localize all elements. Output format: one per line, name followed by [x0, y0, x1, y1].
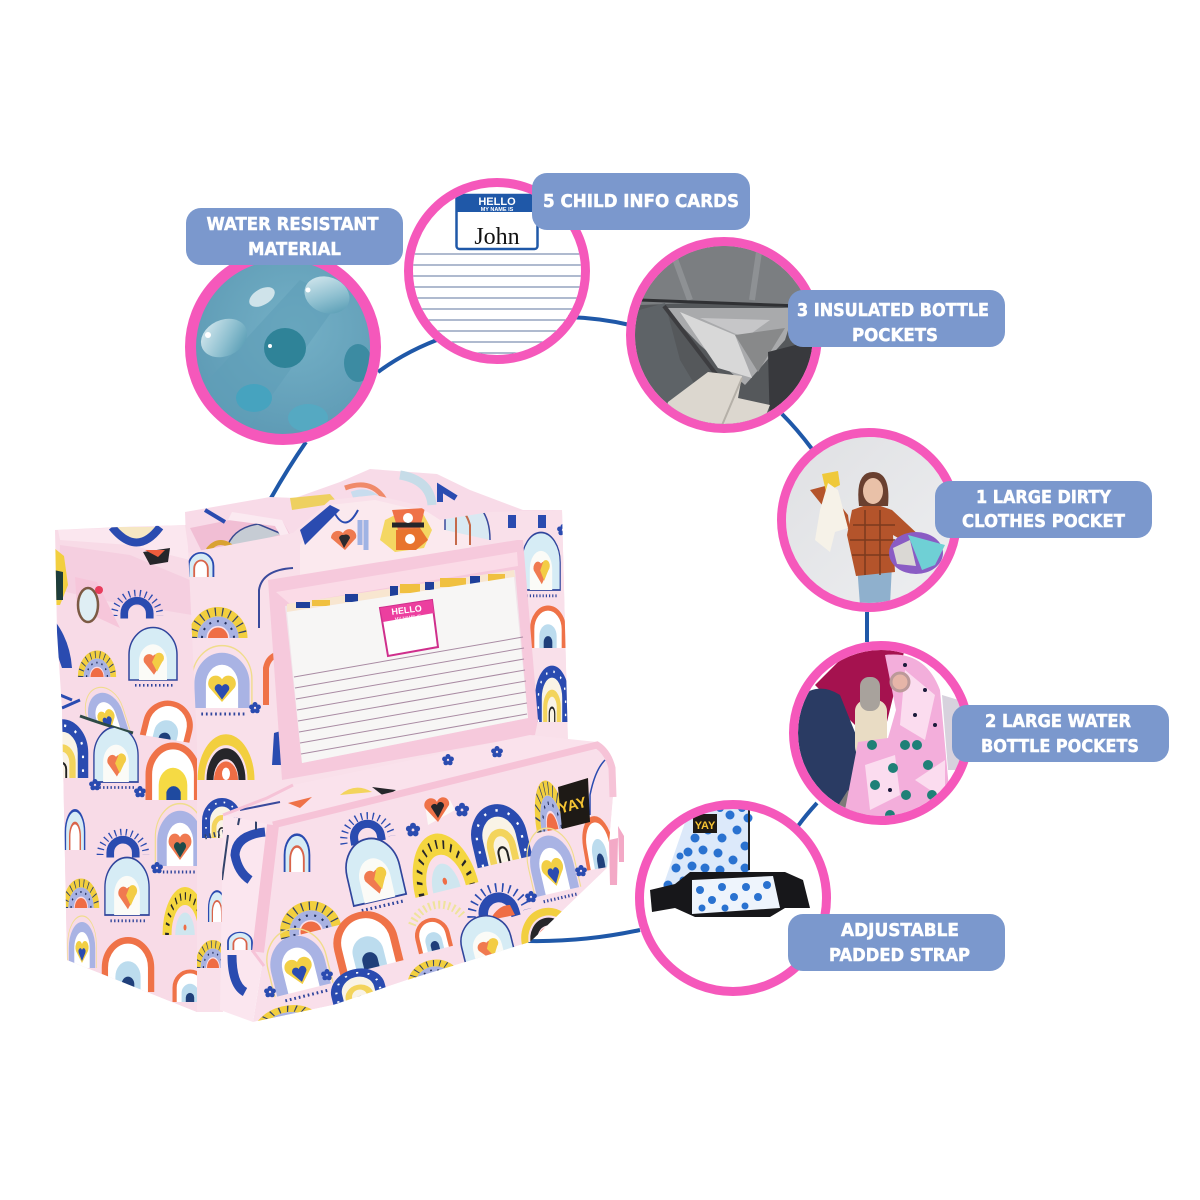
label: 1 large dirty clothes pocket: 1 LARGE DIRTY [976, 488, 1111, 508]
pink ring [640, 804, 826, 992]
printed fabric seen through window [287, 570, 515, 612]
label: adjustable padded strap [788, 914, 1005, 971]
zipper pulls [609, 826, 624, 885]
handle top print [300, 500, 546, 552]
label: water resistant material [186, 208, 403, 265]
label: 2 large water bottle pockets [952, 705, 1169, 762]
circle photo: bottle in patterned pocket [798, 650, 960, 816]
laundry basket [889, 532, 943, 574]
YAY brand label [557, 778, 590, 829]
D-ring tab on side panel [75, 577, 120, 628]
feature: padded strap [640, 804, 830, 995]
jeans [858, 572, 892, 603]
glove and white cloth [822, 471, 840, 492]
infographic canvas [55, 173, 1169, 1022]
tote bag illustration [41, 469, 624, 1035]
pink ring [794, 646, 968, 820]
circle photo: strap and dotted bag [650, 809, 810, 917]
label: 3 insulated bottle pockets: POCKETS [852, 326, 938, 346]
front zip pocket [215, 735, 624, 1035]
feature: dirty clothes pocket [780, 432, 960, 610]
pocket top surface [223, 735, 597, 825]
label: 5 child info cards [532, 173, 750, 230]
circle art: name tag and ruled card [413, 194, 581, 354]
hello name tag: MY NAME IS [481, 207, 514, 213]
bag main front panel with print [179, 490, 575, 1020]
hello name tag: John [474, 224, 520, 250]
pink ring [190, 254, 376, 440]
label: adjustable padded strap: ADJUSTABLE [841, 921, 959, 941]
YAY strap tag: YAY [695, 820, 716, 832]
feature: water bottle pockets [794, 646, 975, 825]
label: 2 large water bottle pockets: BOTTLE POCKETS [981, 737, 1139, 757]
feature: water resistant [190, 254, 380, 440]
YAY strap tag [693, 814, 717, 833]
face and hair [858, 472, 888, 506]
label: 2 large water bottle pockets: 2 LARGE WATER [985, 712, 1131, 732]
label: adjustable padded strap: PADDED STRAP [829, 946, 970, 966]
black strap [650, 872, 810, 917]
feature: child info cards [408, 182, 586, 360]
hello name tag [456, 194, 538, 250]
pink ring [408, 182, 586, 360]
pocket front face with print [253, 745, 615, 1035]
label: water resistant material: WATER RESISTANT [206, 215, 379, 235]
bag back panel and handle [185, 469, 568, 850]
connector arc linking the feature circles to the bag [271, 317, 867, 941]
pink ring [782, 432, 956, 608]
left side panel upper [50, 520, 200, 1020]
clear ID card window with zipper [268, 540, 538, 780]
label: water resistant material: MATERIAL [248, 240, 341, 260]
circle photo: water droplets on teal fabric [196, 265, 370, 434]
label: 1 large dirty clothes pocket: CLOTHES POCKET [962, 512, 1125, 532]
label: 3 insulated bottle pockets: 3 INSULATED BOTTLE [797, 301, 989, 321]
magenta name tag on insert [380, 600, 438, 656]
pink ring [630, 242, 818, 428]
magenta name tag on insert: MY NAME IS [394, 613, 421, 622]
feature: insulated bottle pockets [630, 240, 820, 430]
side water bottle pocket [62, 714, 197, 1012]
pink zipper binding [223, 745, 613, 966]
circle photo: woman holding laundry [786, 437, 950, 603]
label: 1 large dirty clothes pocket [935, 481, 1152, 538]
hello name tag: HELLO [478, 196, 516, 208]
label: 5 child info cards: 5 CHILD INFO CARDS [543, 192, 739, 212]
insert card with ruled lines [287, 577, 528, 763]
circle photo: silver lined pocket [635, 246, 812, 424]
YAY brand label: YAY [557, 794, 589, 817]
plaid shirt [847, 506, 916, 576]
magenta name tag on insert: HELLO [391, 603, 422, 617]
label: 3 insulated bottle pockets [788, 290, 1005, 347]
pocket end panel [220, 815, 267, 1022]
